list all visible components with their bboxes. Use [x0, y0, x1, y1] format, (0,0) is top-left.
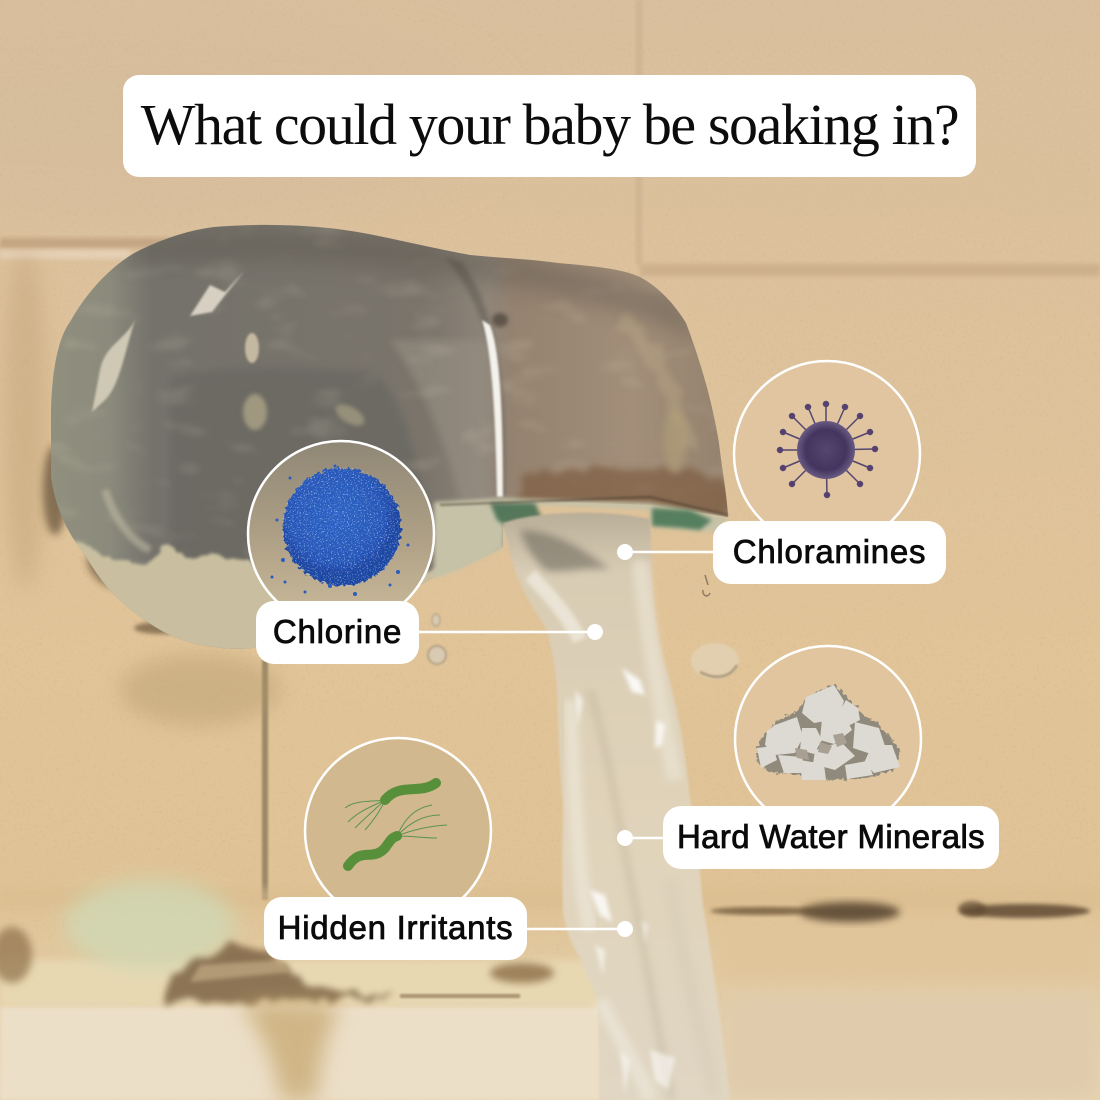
- icon: hard water mineral rocks in circle: [735, 646, 921, 832]
- faucet underside with green mineral deposits: [434, 497, 728, 578]
- grime stains: [0, 445, 1090, 1100]
- faucet: [40, 215, 740, 670]
- label: Hidden Irritants: [264, 897, 527, 960]
- label: Chloramines: Chloramines: [733, 533, 926, 570]
- label: Chlorine: Chlorine: [273, 613, 402, 650]
- icon: chlorine granules in circle: [246, 440, 436, 602]
- title: What could your baby be soaking in?: [141, 92, 958, 157]
- label: Hard Water Minerals: [663, 806, 999, 869]
- label: Hidden Irritants: Hidden Irritants: [278, 909, 513, 946]
- icon: bacteria in circle: [305, 738, 491, 924]
- label: Hard Water Minerals: Hard Water Minerals: [677, 818, 985, 855]
- water stream: [503, 513, 730, 1100]
- icon: virus in circle: [734, 361, 920, 547]
- connector lines: [415, 544, 715, 937]
- label: Chlorine: [256, 601, 419, 664]
- water droplets: [428, 575, 739, 679]
- label: Chloramines: [713, 521, 946, 584]
- title: [123, 75, 976, 177]
